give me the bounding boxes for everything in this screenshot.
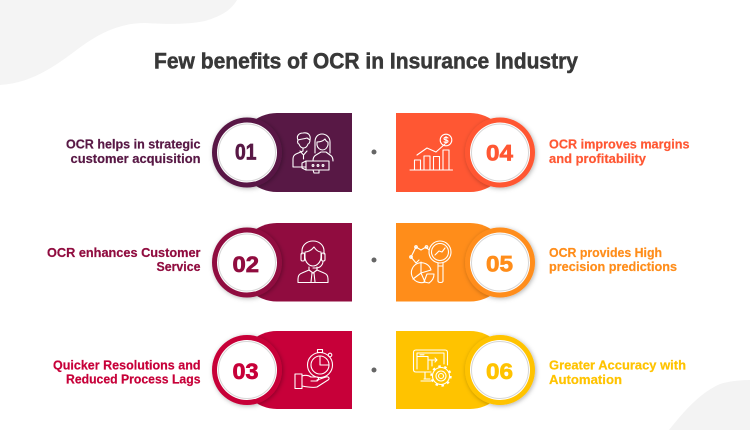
label: item 04 text — [549, 138, 690, 166]
label: item 02 text: Service — [156, 260, 201, 274]
panel: item 05 — [396, 223, 509, 302]
item 06 — [396, 331, 686, 409]
panel: item 03 — [238, 331, 352, 409]
badge: 06: 06 — [486, 359, 513, 384]
center dots — [372, 150, 376, 372]
panel: item 04 — [396, 113, 510, 192]
label: item 01 text: customer acquisition — [70, 152, 200, 166]
background blob: top left — [0, 0, 237, 85]
label: item 02 text — [47, 246, 201, 274]
title: Few benefits of OCR in Insurance Industry — [154, 48, 579, 74]
item 02 — [47, 223, 352, 302]
item 03 — [53, 331, 352, 409]
badge: 02: 02 — [232, 252, 259, 277]
label: item 02 text: OCR enhances Customer — [47, 246, 201, 260]
badge: 01 — [212, 118, 282, 188]
panel: item 02 — [238, 223, 352, 302]
label: item 01 text: OCR helps in strategic — [66, 138, 201, 152]
icon: stopwatch on hand — [295, 350, 332, 388]
badge: 05 — [465, 228, 535, 298]
item 05 — [396, 223, 677, 302]
item 01 — [66, 113, 352, 192]
label: item 03 text — [53, 358, 201, 386]
label: item 06 text: Greater Accuracy with — [549, 358, 686, 372]
icon: magnifier with pie chart — [410, 241, 451, 283]
badge: 04: 04 — [486, 140, 514, 166]
badge: 01: 01 — [235, 140, 256, 164]
label: item 05 text — [549, 246, 677, 274]
icon: customers with megaphone — [293, 133, 333, 173]
label: item 03 text: Reduced Process Lags — [66, 372, 201, 386]
panel: item 01 — [238, 113, 352, 192]
badge: 05: 05 — [486, 252, 513, 276]
label: item 05 text: precision predictions — [549, 260, 677, 274]
label: item 04 text: and profitability — [549, 152, 646, 166]
label: item 06 text — [549, 358, 686, 387]
badge: 02 — [212, 228, 282, 298]
icon: growth chart with coin — [410, 134, 452, 170]
badge: 03 — [212, 335, 282, 405]
label: item 05 text: OCR provides High — [549, 246, 662, 260]
label: item 04 text: OCR improves margins — [549, 138, 690, 152]
badge: 03: 03 — [232, 359, 258, 384]
badge: 06 — [465, 335, 535, 405]
label: item 01 text — [66, 138, 201, 166]
badge: 04 — [465, 118, 535, 188]
background blob: bottom right — [669, 380, 750, 430]
panel: item 06 — [396, 331, 509, 409]
label: item 06 text: Automation — [549, 373, 622, 387]
label: item 03 text: Quicker Resolutions and — [53, 358, 200, 372]
item 04 — [396, 113, 690, 192]
icon: monitor with gear — [414, 350, 451, 386]
icon: headset agent — [298, 241, 328, 282]
